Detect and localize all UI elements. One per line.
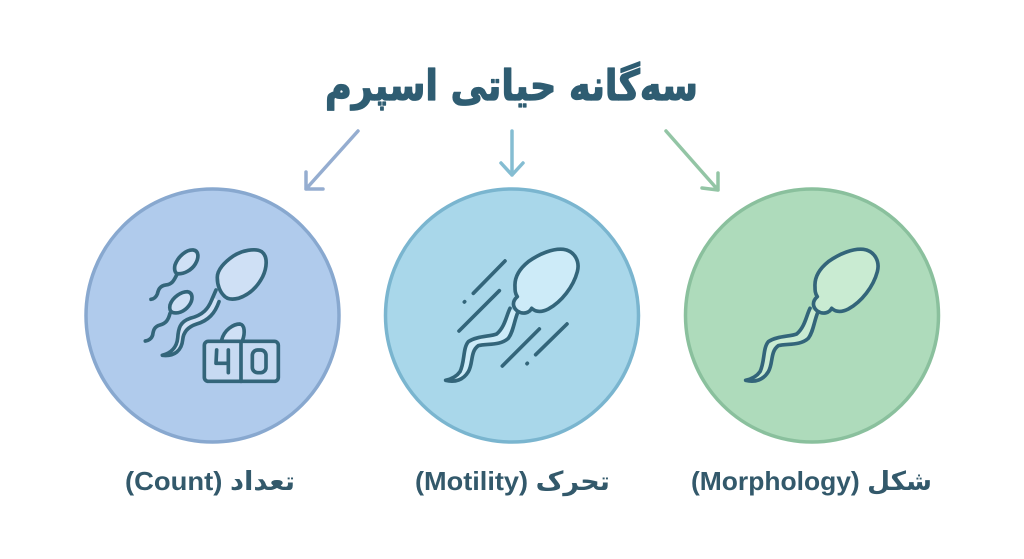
arrow: to motility (501, 131, 523, 175)
circle: count (86, 189, 339, 442)
icon: sperm group with counter (145, 250, 278, 381)
circle: motility (386, 189, 638, 442)
panel: morphology (686, 189, 938, 496)
panel: count (86, 189, 339, 496)
circle: morphology (686, 189, 938, 442)
label: count: تعداد (Count) (125, 466, 295, 496)
panel: motility (386, 189, 638, 497)
arrow: to morphology (666, 131, 718, 190)
label: morphology: شکل (Morphology) (691, 466, 932, 496)
label: motility: تحرک (Motility) (415, 466, 610, 497)
icon: sperm with motion lines (445, 249, 578, 381)
arrow: to count (306, 131, 358, 189)
title: سه‌گانه حیاتی اسپرم (325, 61, 698, 111)
icon: sperm (745, 249, 878, 381)
